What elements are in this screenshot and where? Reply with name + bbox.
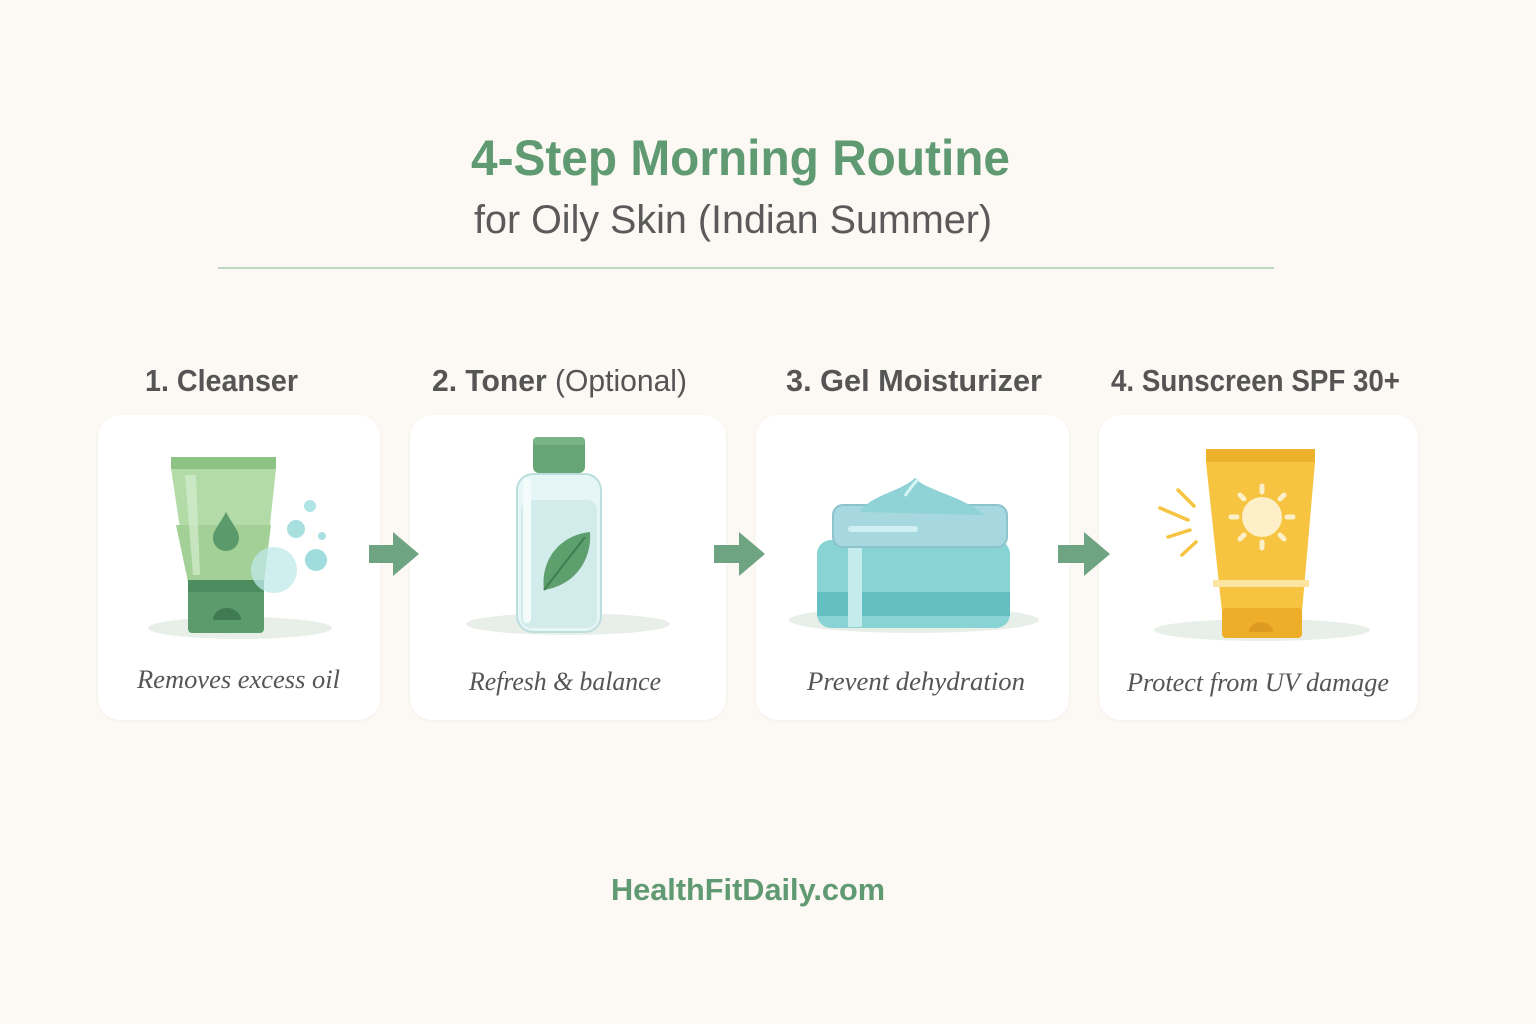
icon: sunscreen tube: [1154, 449, 1370, 641]
footer: HealthFitDaily.com: [611, 872, 885, 907]
caption: step 1: Removes excess oil: [136, 665, 340, 694]
arrow 2: [714, 532, 765, 576]
icon: toner bottle: [466, 437, 670, 635]
card: moisturizer: [756, 415, 1069, 720]
arrow 1: [369, 532, 419, 576]
subtitle: for Oily Skin (Indian Summer): [474, 198, 992, 242]
heading: step 2: 2. Toner (Optional): [432, 363, 687, 398]
caption: step 2: Refresh & balance: [468, 667, 661, 696]
card: cleanser: [98, 415, 380, 720]
icon: gel jar: [789, 478, 1039, 633]
title: 4-Step Morning Routine: [471, 130, 1010, 186]
card: toner: [410, 415, 726, 720]
arrow 3: [1058, 532, 1110, 576]
icon: cleanser tube: [148, 457, 332, 639]
caption: step 4: Protect from UV damage: [1126, 668, 1389, 697]
caption: step 3: Prevent dehydration: [806, 667, 1025, 696]
heading: step 3: 3. Gel Moisturizer: [786, 363, 1042, 398]
heading: step 1: 1. Cleanser: [145, 363, 298, 398]
card: sunscreen: [1099, 415, 1418, 720]
heading: step 4: 4. Sunscreen SPF 30+: [1111, 363, 1400, 398]
